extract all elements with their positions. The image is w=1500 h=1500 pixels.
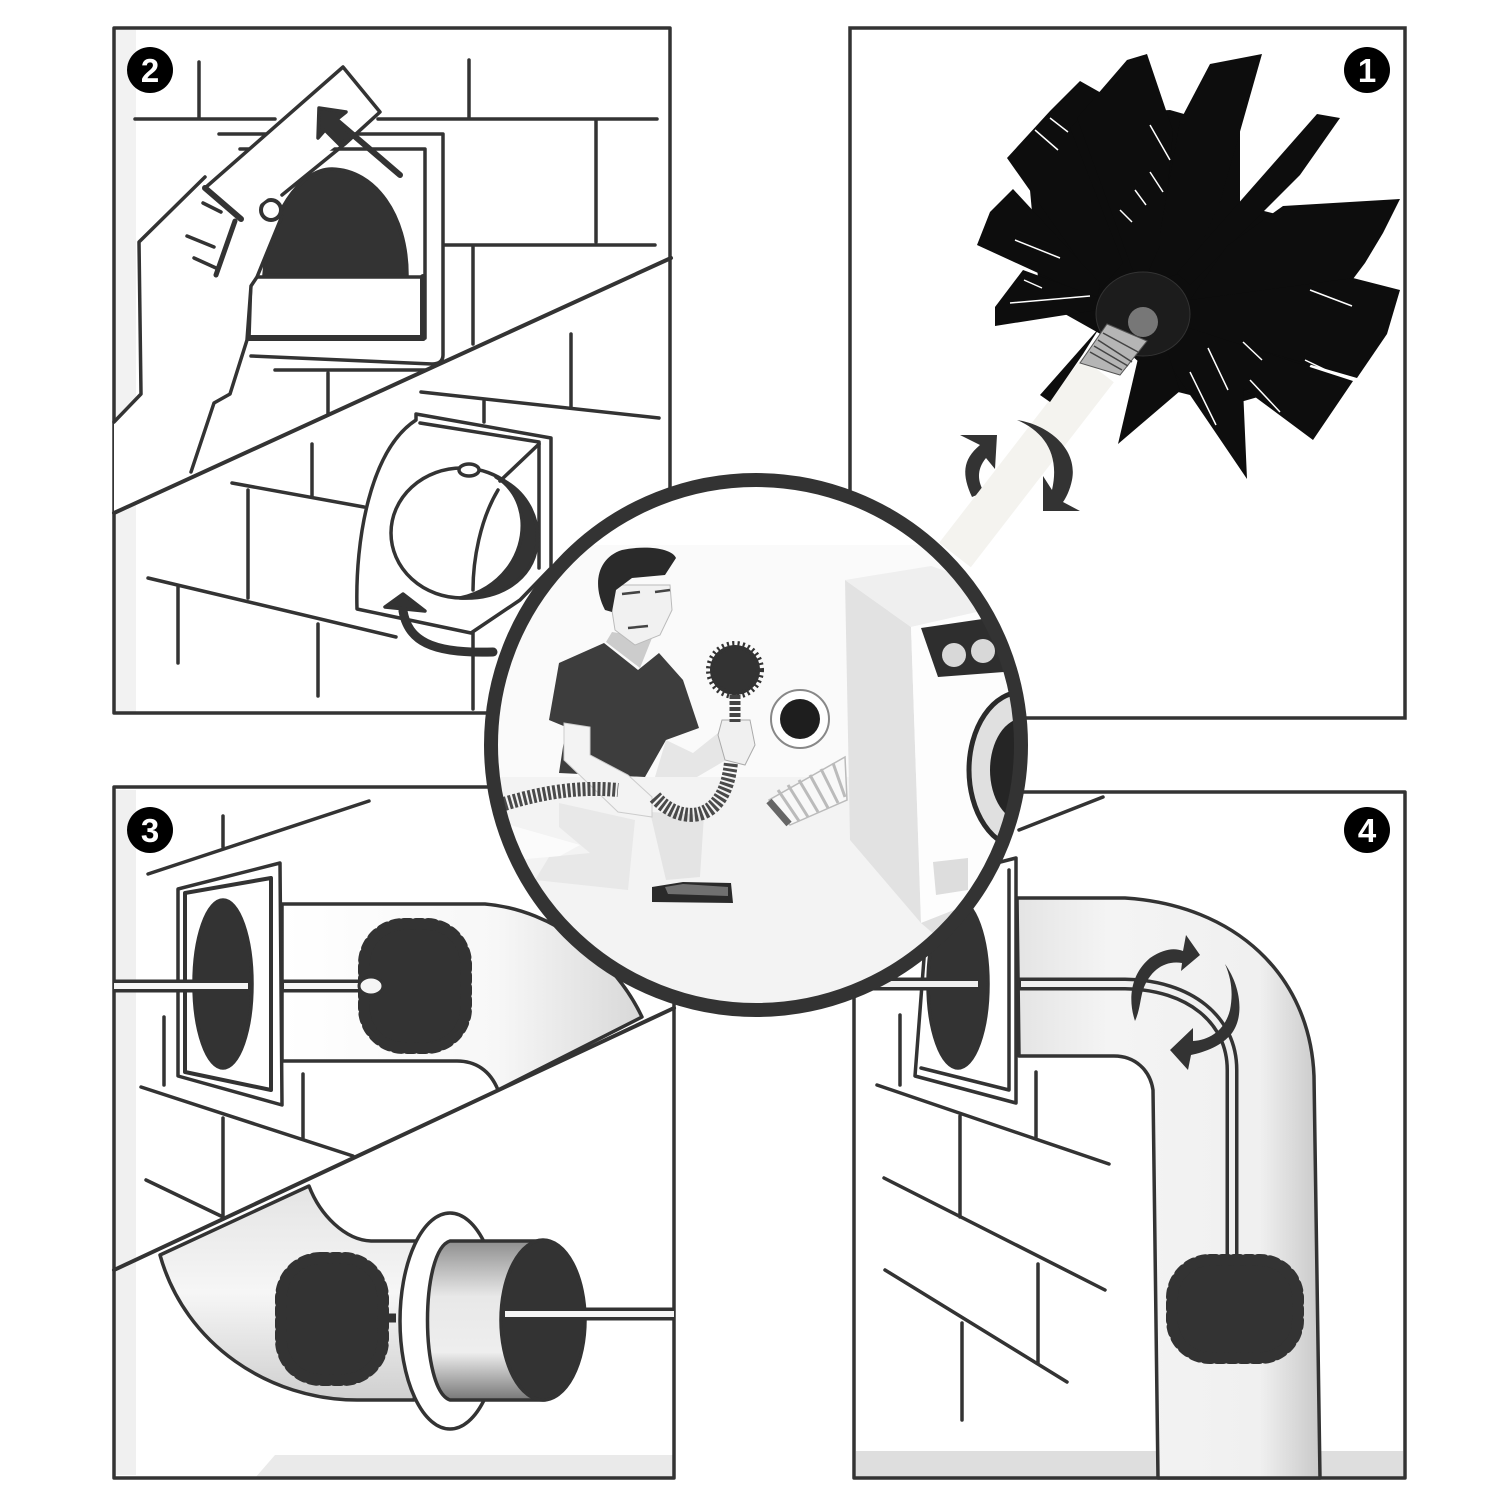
- raised flap with arrow: [205, 67, 400, 219]
- lower wall bricks: [148, 334, 659, 709]
- lower vent arrow: [385, 594, 493, 652]
- panel 4: rotating brush through duct: [854, 792, 1405, 1478]
- upper vent housing: [219, 134, 443, 364]
- lower vent with open damper: [357, 414, 551, 633]
- flexible hose: [769, 757, 847, 825]
- upper duct: [114, 863, 642, 1105]
- panel 1: brush head and rod: [850, 28, 1405, 718]
- coiled hose: [504, 762, 731, 815]
- hand and fist: [718, 720, 755, 765]
- center circle illustration: [490, 475, 1075, 1017]
- badge 4: 4: [1358, 812, 1377, 849]
- panel 2: opening the vent cover: [114, 28, 671, 713]
- badge 4: [1344, 807, 1390, 853]
- face details: [622, 590, 670, 628]
- hand holding the flap: [114, 177, 282, 513]
- brush bristles: [977, 54, 1400, 479]
- duct elbow: [854, 858, 1320, 1478]
- rotation arrows: [1131, 935, 1239, 1070]
- wall duct opening: [771, 690, 829, 748]
- hair: [598, 548, 676, 612]
- bristle highlights: [1010, 118, 1352, 425]
- badge 3: 3: [141, 812, 159, 849]
- badge 2: [127, 47, 173, 93]
- rod: [955, 370, 1098, 555]
- shirt: [549, 643, 699, 777]
- man: [504, 548, 760, 903]
- brush tool: [710, 645, 760, 722]
- badge 2: 2: [141, 52, 159, 89]
- neck and collar: [606, 632, 652, 668]
- metal ferrule: [1080, 324, 1147, 375]
- standing leg: [650, 812, 704, 880]
- badge 3: [127, 807, 173, 853]
- badge 1: 1: [1358, 52, 1376, 89]
- head: [608, 585, 672, 645]
- arms: [564, 723, 652, 817]
- shoe: [652, 882, 733, 903]
- badge 1: [1344, 47, 1390, 93]
- dryer: [845, 566, 1014, 933]
- kneeling leg: [535, 803, 635, 890]
- lower duct: [160, 1186, 674, 1429]
- right rotation arrow: [1017, 420, 1080, 511]
- brush hub: [1096, 272, 1190, 356]
- left rotation arrow: [960, 435, 997, 497]
- panel 3: inserting the brush: [114, 787, 674, 1478]
